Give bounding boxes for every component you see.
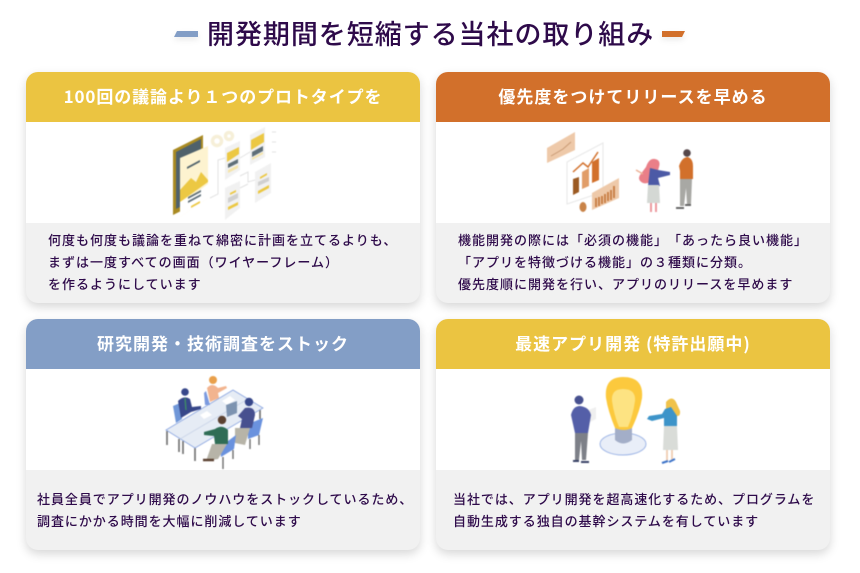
icon: gears [212,132,232,146]
panel heading: prototype: 100回の議論より１つのプロトタイプを [64,83,382,108]
panel heading: priority: 優先度をつけてリリースを早める [498,83,768,108]
icon: bulb with base [600,377,646,455]
panel: priority [436,72,830,303]
panel heading: fastest development: 最速アプリ開発 (特許出願中) [515,330,751,355]
body text: research stock: 調査にかかる時間を大幅に削減しています [37,511,302,530]
body text: research stock [37,489,413,530]
panel heading: research stock [26,319,420,369]
body text: research stock: 社員全員でアプリ開発のノウハウをストックしているため、 [37,489,413,508]
icon: top card [547,132,575,163]
icon: woman right [647,398,680,463]
icon: coin [580,202,586,212]
title accent: orange bar [662,31,685,40]
panel: fastest development [436,319,830,550]
illustration area: team and charts [436,122,830,223]
title accent: blue bar [174,31,198,40]
panel heading: fastest development [436,319,830,369]
body text: priority [458,230,808,293]
panel: prototype [26,72,420,303]
icon: small chart card [592,178,619,210]
icon: screen top centre [225,141,240,180]
body text: fastest development: 自動生成する独自の基幹システムを有しています [453,511,759,530]
icon: man left [571,396,596,462]
icon: screen top right [250,127,265,165]
body text: prototype [48,230,397,293]
body text: prototype: まずは一度すべての画面（ワイヤーフレーム） [48,252,339,271]
body text: fastest development: 当社では、アプリ開発を超高速化するため、プログラムを [453,489,815,508]
icon: table [166,390,263,461]
icon: man [676,149,693,208]
body text: prototype: 何度も何度も議論を重ねて綿密に計画を立てるよりも、 [48,230,397,249]
title: 開発期間を短縮する当社の取り組み [207,13,654,52]
panel heading: research stock: 研究開発・技術調査をストック [97,330,349,355]
icon: person right with laptop [226,398,263,449]
icon: screen bottom right [255,163,271,203]
illustration area: wireframes [26,122,420,223]
icon: person top [204,376,227,405]
icon: screen bottom centre [225,181,240,220]
body text: priority: 機能開発の際には「必須の機能」「あったら良い機能」 [458,230,808,249]
panel: research stock [26,319,420,550]
body text: priority: 優先度順に開発を行い、アプリのリリースを早めます [458,274,793,293]
icon: bar chart board [567,143,603,204]
icon: person front [203,416,236,469]
panel heading: prototype [26,72,420,122]
illustration area: light bulb [436,369,830,470]
icon: woman [636,159,670,212]
body text: prototype: を作るようにしています [48,274,202,293]
body text: fastest development [453,489,815,530]
body text: priority: 「アプリを特徴づける機能」の３種類に分類。 [458,252,752,271]
icon: person left [173,388,201,423]
icon: large phone [173,135,208,217]
illustration area: meeting [26,369,420,470]
panel heading: priority [436,72,830,122]
